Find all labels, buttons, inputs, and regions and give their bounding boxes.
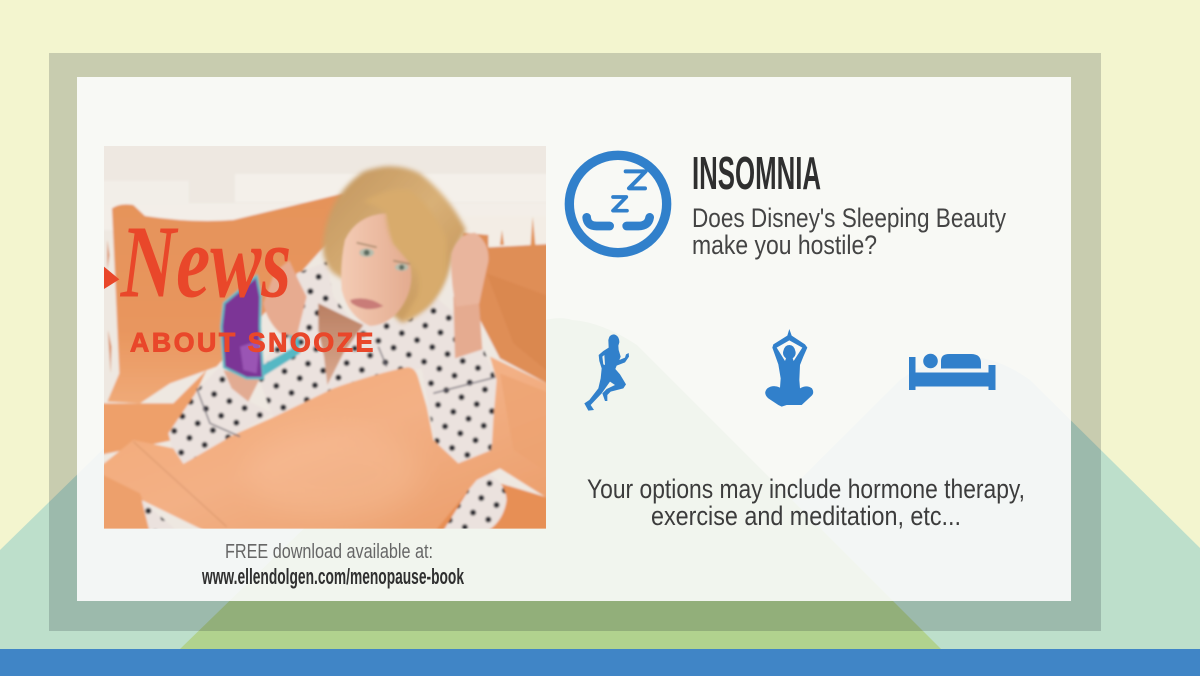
fringe <box>372 197 449 324</box>
bed left <box>100 370 207 455</box>
face <box>341 213 411 326</box>
neck and chest <box>318 303 363 385</box>
icon: sleeping face <box>569 155 667 253</box>
torso <box>257 262 455 418</box>
right lower bed <box>435 482 546 529</box>
front pillow <box>100 357 550 533</box>
teal mountain left <box>0 317 660 649</box>
pajama pants <box>442 476 508 529</box>
outer frame <box>49 53 1101 631</box>
left wrist <box>223 370 260 402</box>
options text: exercise and meditation, etc... <box>651 501 961 531</box>
triangle marker <box>104 267 119 289</box>
right hand <box>451 233 488 307</box>
subheading: make you hostile? <box>692 230 877 260</box>
wall <box>100 140 550 533</box>
photo: woman in polka-dot pajamas with sleep mask <box>100 140 550 533</box>
icon: bed <box>909 354 996 390</box>
right sleeve <box>426 350 496 460</box>
sleeve piping <box>197 347 495 437</box>
main panel <box>77 77 1071 601</box>
download url: www.ellendolgen.com/menopause-book <box>201 564 464 589</box>
teal mountain right <box>630 356 1200 649</box>
mask strap <box>262 331 302 376</box>
right pillows <box>462 232 546 385</box>
subheading: Does Disney's Sleeping Beauty <box>692 203 1006 233</box>
pillow highlight right <box>501 374 546 435</box>
hair <box>323 166 466 323</box>
photo lettering: about snooze: ABOUT SNOOZE <box>130 327 373 357</box>
left hand <box>263 261 307 337</box>
subheading <box>692 203 1006 260</box>
options text: Your options may include hormone therapy, <box>587 474 1025 504</box>
blue footer bar <box>0 649 1200 676</box>
right forearm <box>453 293 482 358</box>
heading: INSOMNIA <box>692 147 821 199</box>
back pillow <box>107 193 343 403</box>
options text <box>587 474 1025 531</box>
icon: yoga figure <box>765 329 813 407</box>
left sleeve <box>167 374 265 458</box>
photo lettering: News: News <box>120 206 291 320</box>
eye mask <box>221 276 263 378</box>
green mountain <box>180 318 941 649</box>
eyes and mouth <box>359 248 374 257</box>
download caption: FREE download available at: <box>225 541 433 563</box>
icon: runner <box>584 334 629 411</box>
